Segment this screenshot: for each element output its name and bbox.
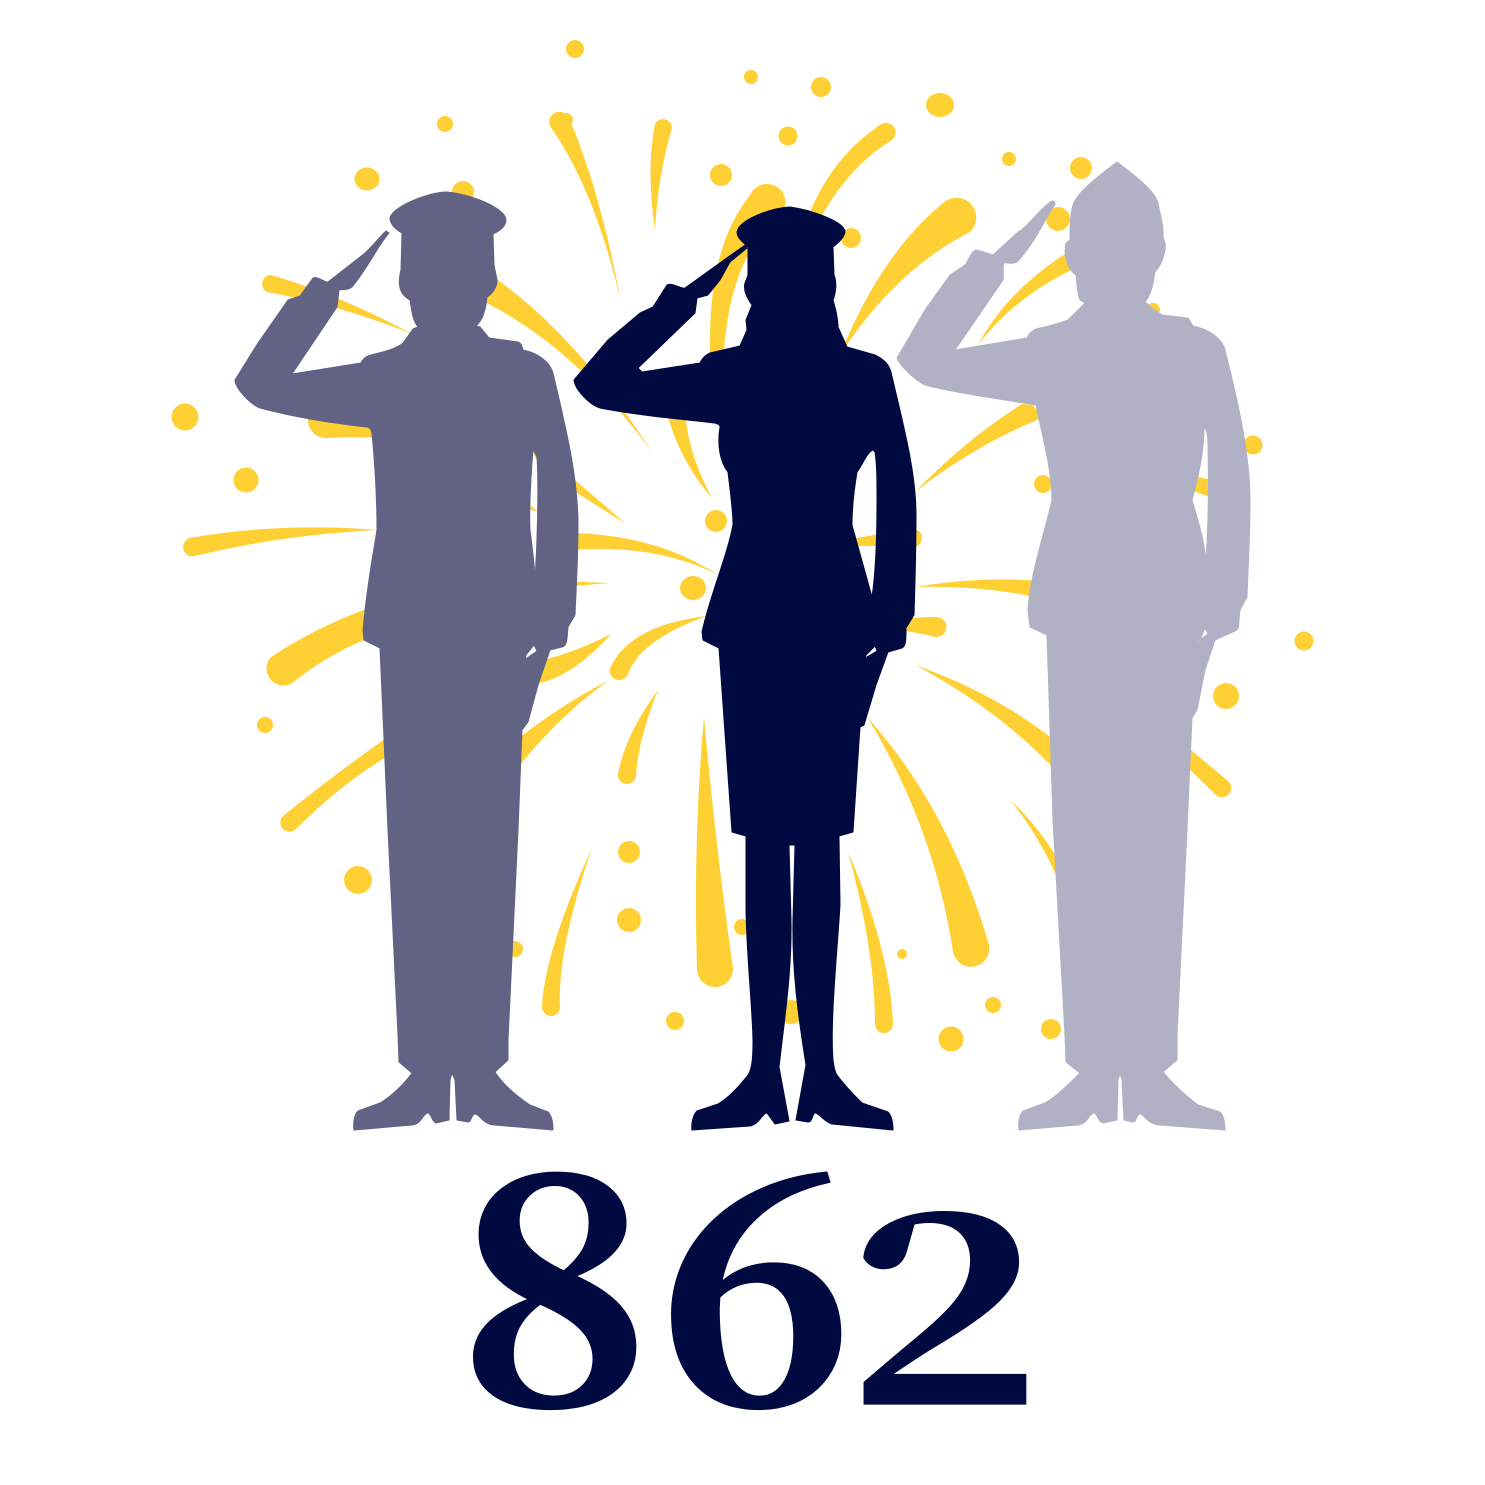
fireworks burst bbox=[172, 40, 1314, 1052]
number: 862 bbox=[458, 1040, 1040, 1485]
number: 862: 6 bbox=[660, 1040, 853, 1485]
number: 862: 8 bbox=[458, 1040, 651, 1485]
number: 862: 2 bbox=[847, 1102, 1040, 1478]
silhouette: right saluting soldier with garrison cap bbox=[897, 162, 1250, 1130]
silhouette: center saluting woman officer bbox=[574, 207, 916, 1130]
silhouette: left saluting officer bbox=[235, 192, 578, 1130]
